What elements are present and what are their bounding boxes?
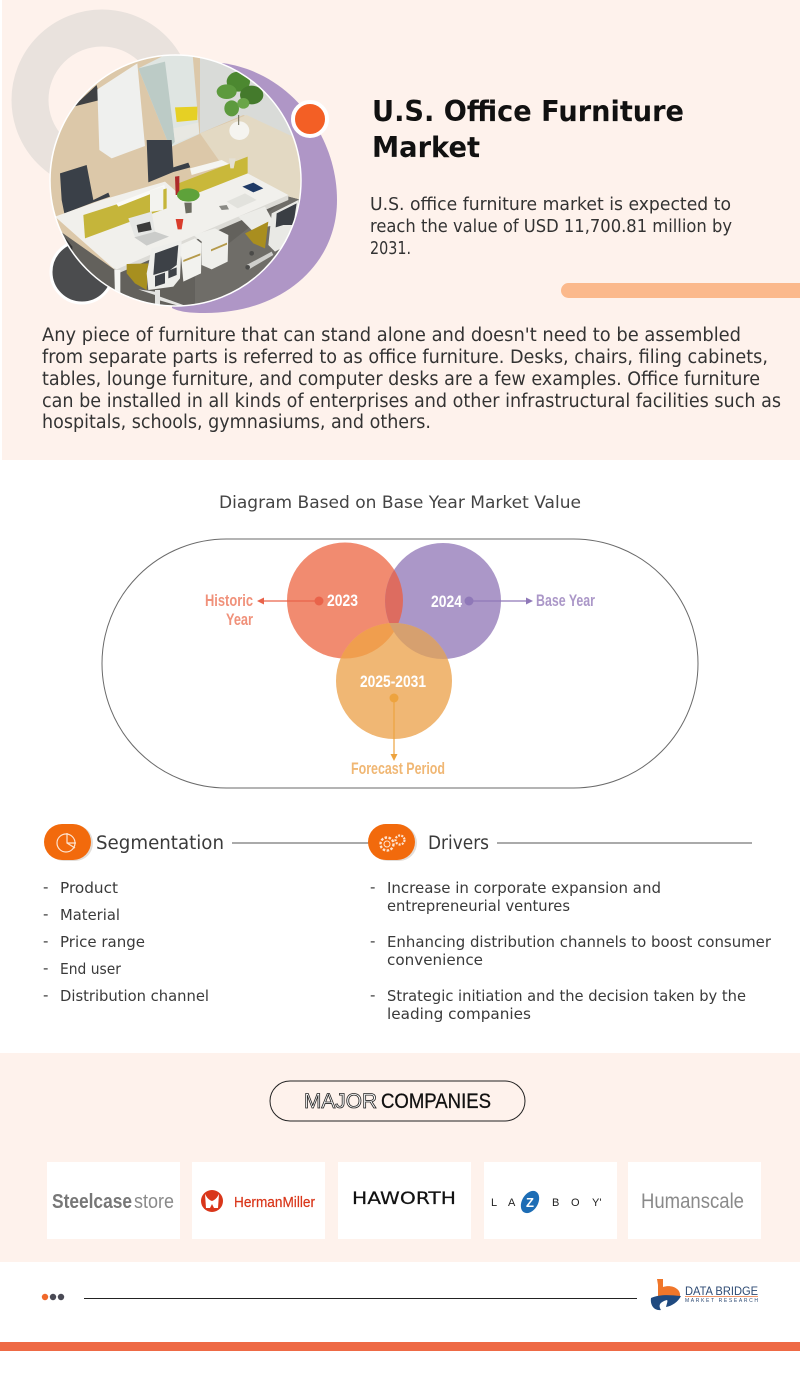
orange dot (293, 102, 327, 136)
list: segmentation: Product (60, 879, 118, 897)
dark circle (51, 241, 113, 303)
yellow panels (83, 188, 167, 238)
list: drivers (370, 878, 772, 1023)
list: drivers: Strategic initiation and the decision taken by the (387, 987, 746, 1005)
list: segmentation: - (43, 878, 48, 896)
circle: 2023 (287, 542, 403, 658)
heading pill (270, 1081, 525, 1121)
heading pill: COMPANIES (381, 1090, 491, 1113)
description text: tables, lounge furniture, and computer desks are a few examples. Office furniture (42, 369, 760, 390)
list: drivers: Enhancing distribution channels to boost consumer (387, 933, 772, 951)
label: 2023: 2023 (327, 591, 358, 610)
icon: pie chart (44, 824, 93, 861)
list: segmentation: - (43, 905, 48, 923)
logo: Haworth (338, 1162, 471, 1239)
venn diagram (102, 539, 698, 788)
title: U.S. Office Furniture (372, 95, 684, 128)
label: base year: Base Year (536, 591, 595, 610)
list: segmentation: - (43, 959, 48, 977)
title (372, 95, 684, 164)
list: segmentation: - (43, 932, 48, 950)
panel: major companies (0, 1053, 800, 1262)
icon: gears (368, 824, 417, 861)
arrow: forecast (390, 694, 398, 761)
front chair (127, 263, 148, 290)
logo: Herman Miller (192, 1162, 325, 1239)
list: drivers: Increase in corporate expansion and (387, 879, 661, 897)
logo: La-Z-Boy: Y' (592, 1197, 601, 1209)
arrow: historic (257, 596, 324, 606)
intro text: 2031. (370, 238, 411, 259)
description text: hospitals, schools, gymnasiums, and others. (42, 412, 431, 433)
list: segmentation: End user (60, 960, 122, 978)
footer bar (0, 1342, 800, 1351)
list: segmentation: Distribution channel (60, 987, 209, 1005)
logo: Data Bridge: DATA BRIDGE (685, 1284, 758, 1298)
panel: header (2, 0, 800, 460)
overlap with 2024 (390, 623, 448, 659)
desk top (55, 173, 288, 270)
circle: 2025-2031 (336, 623, 452, 739)
logo: Steelcase: store (134, 1191, 174, 1213)
decorative beige ring (30, 28, 174, 172)
purple crescent (172, 63, 337, 313)
list: drivers: convenience (387, 951, 483, 969)
circle: 2024 (385, 543, 501, 659)
overlap with 2023 (340, 623, 398, 658)
right chair (238, 207, 275, 230)
list: segmentation (43, 878, 209, 1005)
orange accent bar (561, 283, 800, 298)
list: drivers: - (370, 878, 375, 896)
logo: La-Z-Boy (484, 1162, 617, 1239)
intro text (370, 194, 732, 259)
far chairs (147, 140, 190, 182)
intro text: reach the value of USD 11,700.81 million by (370, 216, 732, 237)
pedestals (193, 228, 228, 269)
label: 2025-2031: 2025-2031 (360, 672, 426, 691)
logo: Steelcase (47, 1162, 180, 1239)
logo: La-Z-Boy: B (552, 1197, 559, 1209)
footer dots (42, 1294, 64, 1300)
list: segmentation: Material (60, 906, 120, 924)
panel: segmentation (43, 824, 370, 1005)
panel: drivers (368, 824, 772, 1023)
label: 2024: 2024 (431, 592, 462, 611)
logo: Herman Miller: HermanMiller (234, 1195, 315, 1211)
list: drivers: leading companies (387, 1005, 531, 1023)
description text (42, 325, 781, 433)
office photo illustration (50, 53, 302, 313)
logo: Humanscale: Humanscale (641, 1190, 744, 1213)
desk items (128, 212, 155, 237)
list: drivers: - (370, 932, 375, 950)
label: historic year (205, 591, 253, 629)
heading: drivers: Drivers (428, 833, 489, 854)
logo: La-Z-Boy: L (491, 1197, 497, 1209)
logo: La-Z-Boy: A (508, 1197, 516, 1209)
logo: Data Bridge (651, 1279, 758, 1310)
description text: from separate parts is referred to as office furniture. Desks, chairs, filing cabinets, (42, 347, 768, 368)
list: drivers: - (370, 986, 375, 1004)
dark floor (58, 197, 302, 313)
logo: Steelcase: Steelcase (52, 1191, 132, 1213)
diagram heading: Diagram Based on Base Year Market Value (219, 493, 581, 513)
list: segmentation: Price range (60, 933, 145, 951)
arrow: base year (464, 596, 533, 606)
logo: La-Z-Boy: Z (526, 1195, 534, 1210)
description text: Any piece of furniture that can stand alone and doesn't need to be assembled (42, 325, 741, 346)
logo: Humanscale (628, 1162, 761, 1239)
logo: Haworth: HAWORTH (352, 1189, 456, 1208)
intro text: U.S. office furniture market is expected to (370, 194, 731, 215)
list: drivers: entrepreneurial ventures (387, 897, 570, 915)
label: forecast period: Forecast Period (351, 759, 445, 778)
description text: can be installed in all kinds of enterprises and other infrastructural facilities such as (42, 391, 781, 412)
title: Market (372, 131, 480, 164)
heading pill: MAJOR (304, 1090, 377, 1113)
label: historic year: Year (226, 610, 253, 629)
circle overlap (385, 570, 403, 623)
logo: La-Z-Boy: O (571, 1197, 580, 1209)
list: segmentation: - (43, 986, 48, 1004)
logo: Data Bridge: MARKET RESEARCH (685, 1298, 758, 1304)
label: historic year: Historic (205, 591, 253, 610)
heading: segmentation: Segmentation (96, 833, 224, 854)
